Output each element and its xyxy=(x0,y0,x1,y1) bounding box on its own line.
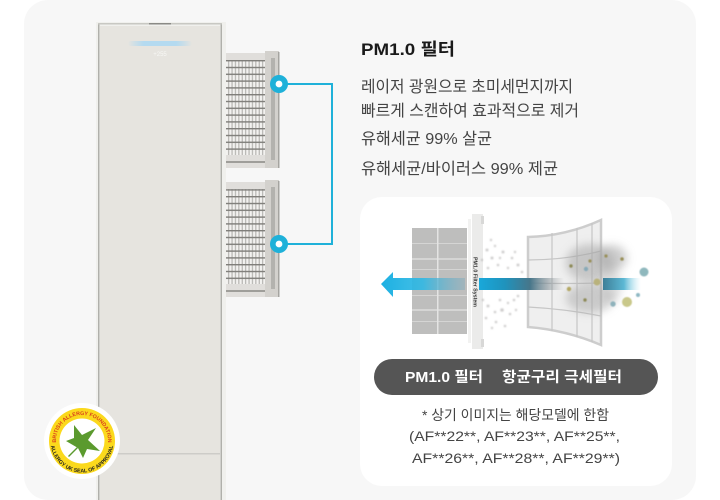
filter label: PM1.0 Filter System xyxy=(472,257,478,307)
badge: British Allergy Foundation seal xyxy=(49,406,120,476)
heading: PM1.0 필터 xyxy=(361,40,455,59)
illustration: PM1.0 filter xyxy=(412,214,484,349)
footnote: AF**26**, AF**28**, AF**29**) xyxy=(412,450,620,466)
display readout: +255 xyxy=(153,52,167,58)
description text: 유해세균/바이러스 99% 제균 xyxy=(361,160,558,178)
description text xyxy=(361,78,579,178)
footnote: (AF**22**, AF**23**, AF**25**, xyxy=(409,428,620,444)
callout connector xyxy=(273,78,332,250)
illustration: dust cloud xyxy=(566,244,627,313)
marker: lower filter xyxy=(273,238,285,250)
air purifier unit xyxy=(96,22,226,500)
footnote: * 상기 이미지는 해당모델에 한함 xyxy=(422,407,609,423)
description text: 빠르게 스캔하여 효과적으로 제거 xyxy=(361,102,579,120)
description text: 레이저 광원으로 초미세먼지까지 xyxy=(361,78,573,96)
legend: PM1.0 filter: PM1.0 필터 xyxy=(405,369,483,386)
upper filter xyxy=(226,51,280,168)
badge bottom text: ALLERGY UK SEAL OF APPROVAL xyxy=(50,446,114,472)
illustration: particles xyxy=(567,254,648,307)
icon: green leaf xyxy=(66,425,100,458)
legend: copper filter: 항균구리 극세필터 xyxy=(502,369,622,386)
lower filter xyxy=(226,180,280,297)
illustration: airflow arrow xyxy=(381,272,641,297)
badge top text: BRITISH ALLERGY FOUNDATION xyxy=(52,411,112,442)
illustration: dust scatter xyxy=(481,239,523,329)
illustration: mesh pre-filter xyxy=(528,220,601,345)
footnote xyxy=(409,407,620,466)
legend pill xyxy=(374,359,658,395)
panel: filter illustration card xyxy=(360,197,672,486)
display glow xyxy=(128,41,192,46)
marker: upper filter xyxy=(273,78,285,90)
description text: 유해세균 99% 살균 xyxy=(361,130,492,148)
